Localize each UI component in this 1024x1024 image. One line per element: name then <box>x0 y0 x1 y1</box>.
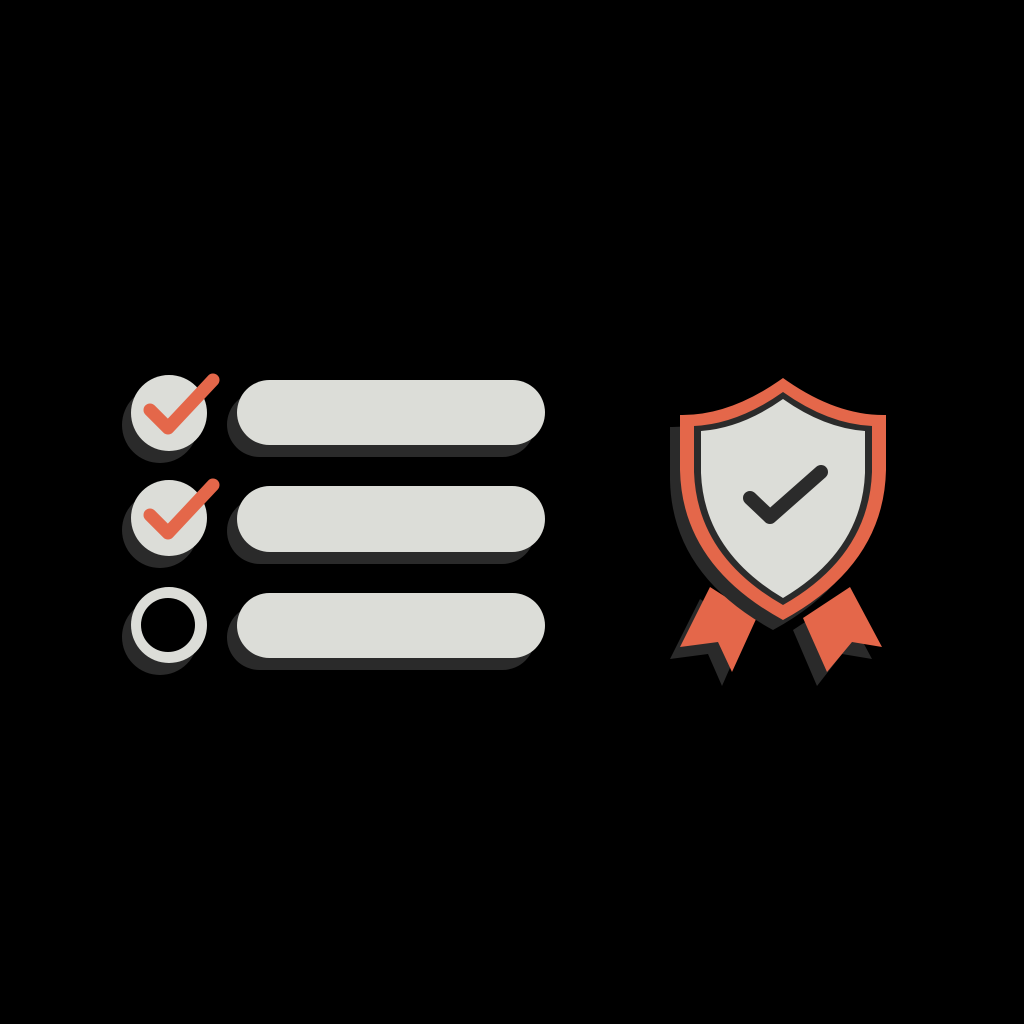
item 1 <box>122 375 545 463</box>
badge: shield with ribbons <box>670 378 886 686</box>
shield dark outline <box>694 392 872 605</box>
ribbons <box>680 587 882 672</box>
icon: check mark <box>750 472 821 517</box>
checklist <box>122 375 545 675</box>
shield outer <box>680 378 886 620</box>
item 3 <box>122 587 545 675</box>
ribbon shadows <box>670 599 872 686</box>
shield shadow <box>670 390 876 630</box>
item 2 <box>122 480 545 568</box>
shield inner <box>701 399 865 598</box>
